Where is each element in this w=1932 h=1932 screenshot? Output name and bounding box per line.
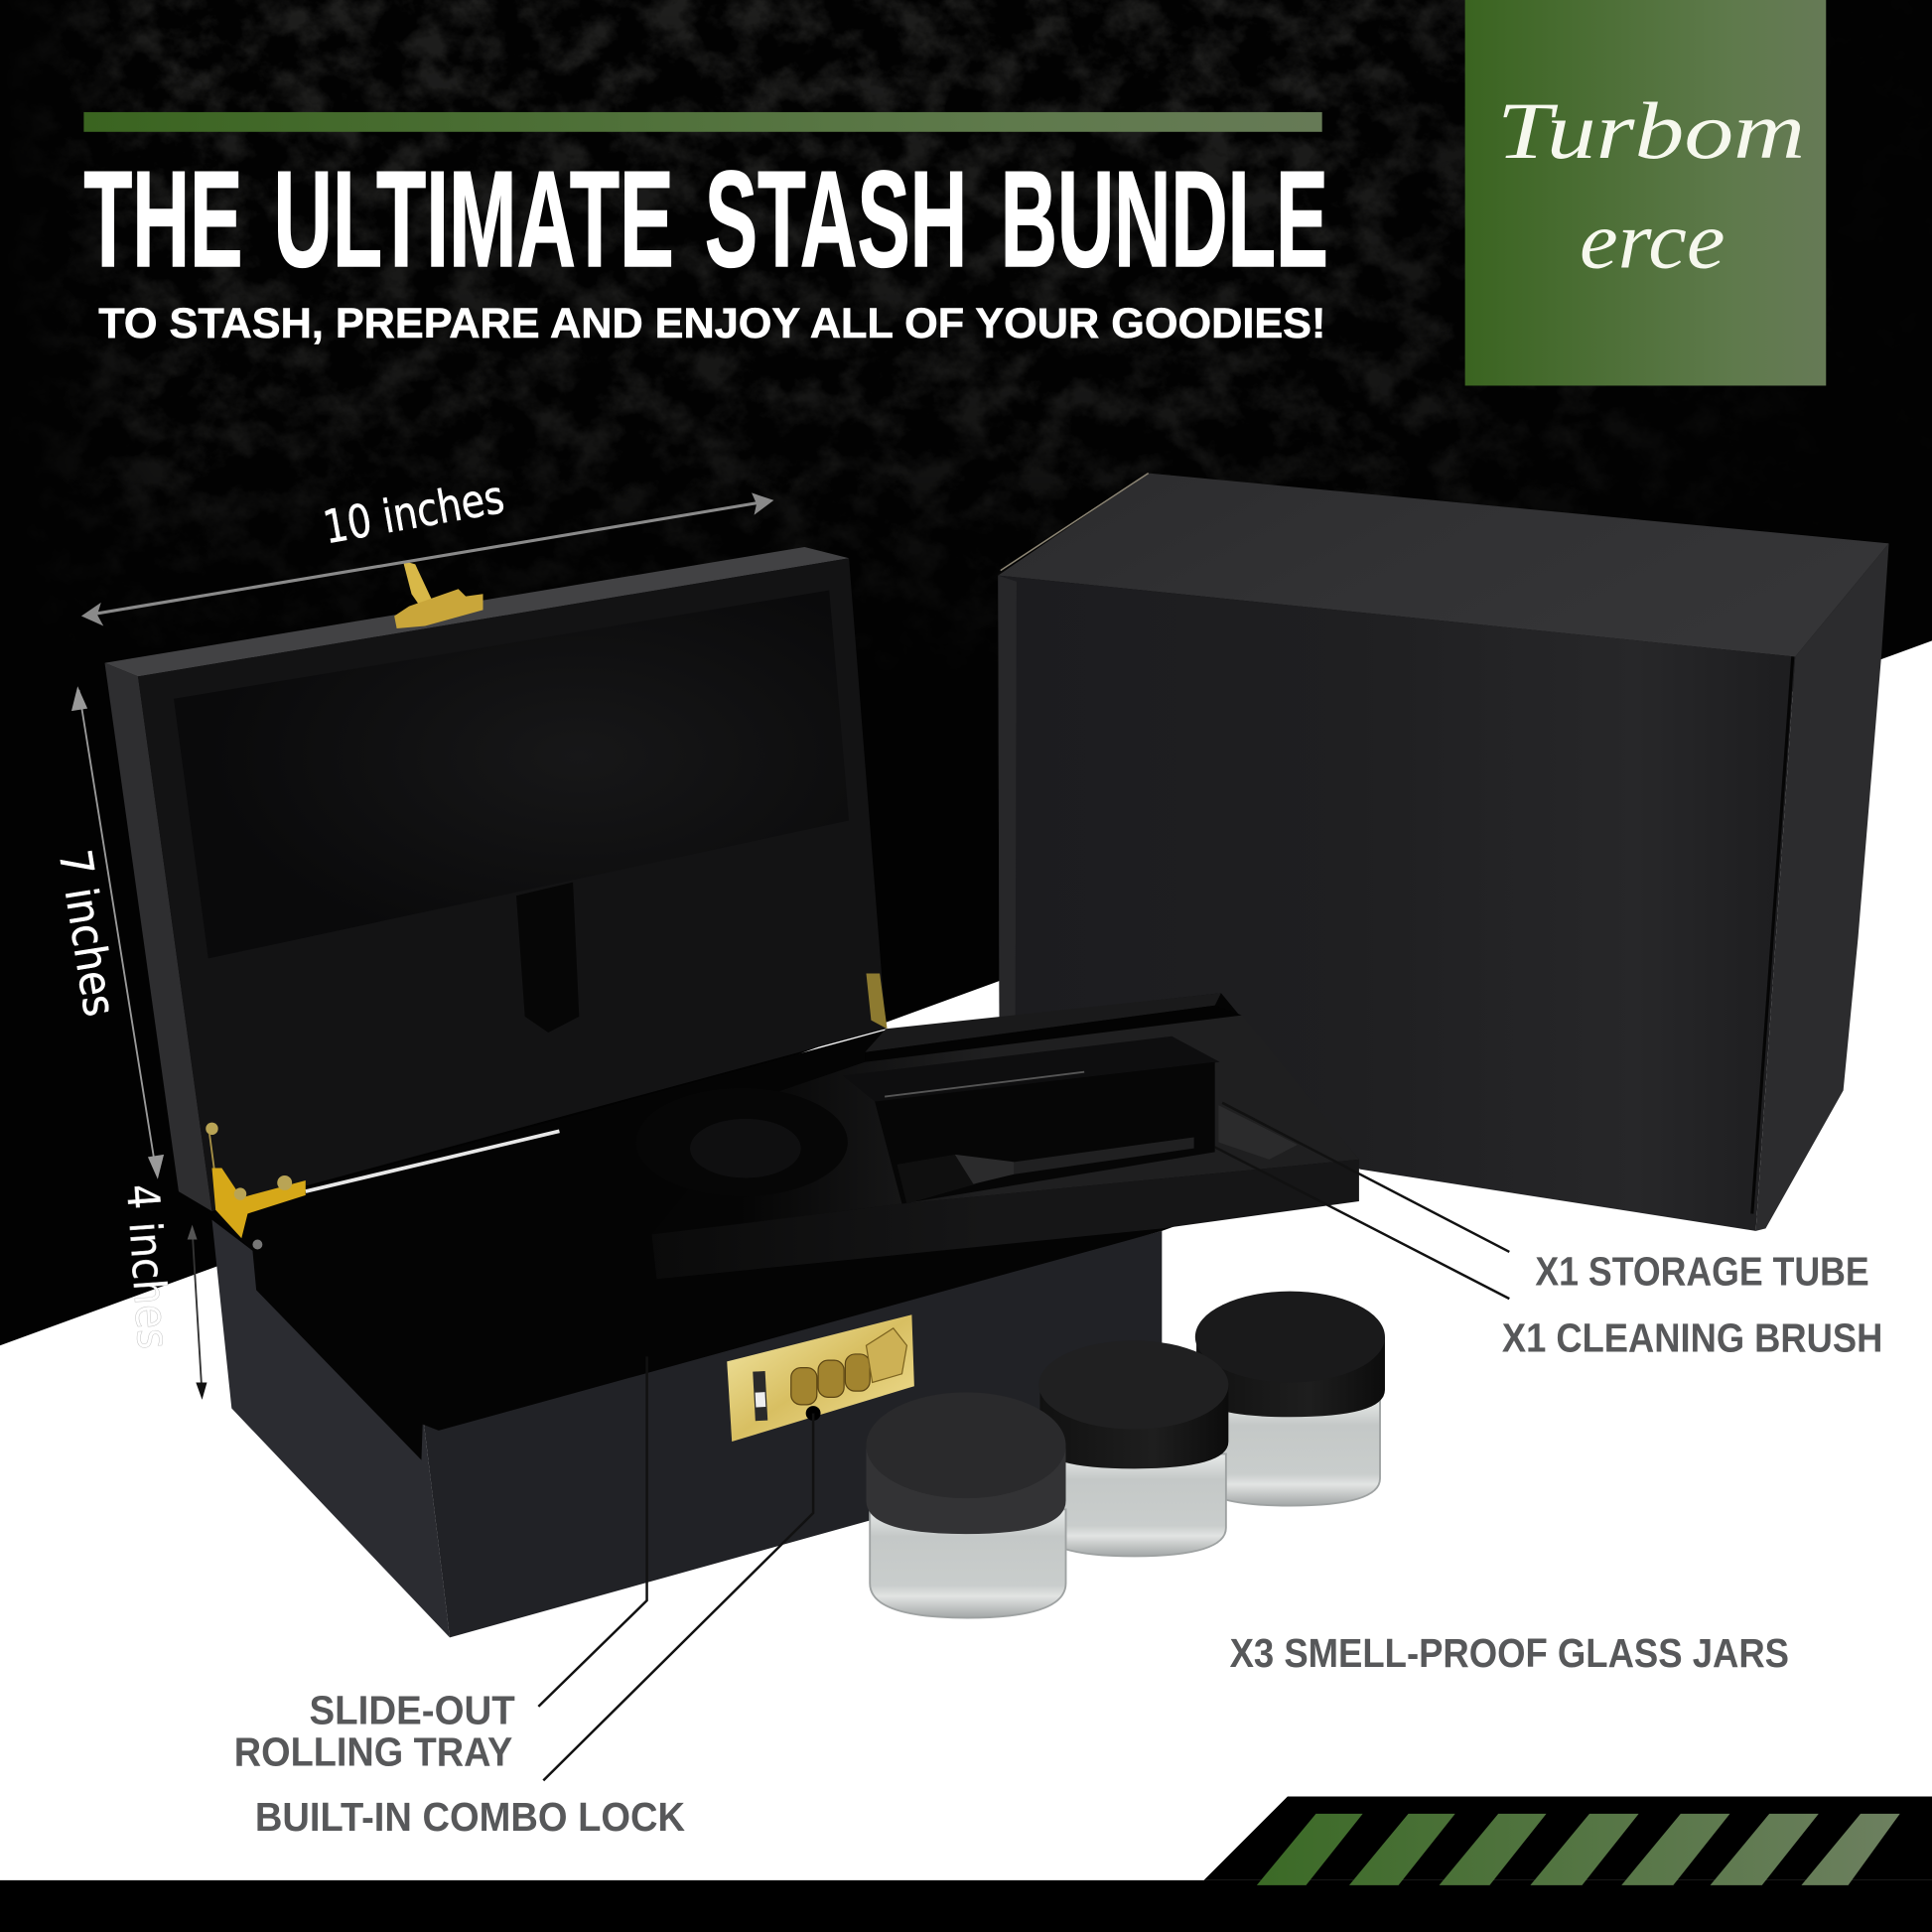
jar 2 xyxy=(1038,1340,1228,1556)
tray top surface xyxy=(652,1016,1359,1235)
label: rolling tray: SLIDE-OUT xyxy=(310,1687,515,1732)
tray back strip xyxy=(865,993,1221,1052)
storage jars xyxy=(866,1292,1385,1618)
dimension: 10 inches: 10 inches xyxy=(319,470,508,554)
tube channel xyxy=(843,1036,1220,1102)
lid left edge xyxy=(104,663,211,1211)
lid top edge xyxy=(104,547,849,676)
white rod xyxy=(306,1131,559,1191)
bottom black band xyxy=(0,1796,1932,1932)
brand text: erce xyxy=(1580,195,1725,285)
tray groove xyxy=(865,1006,1242,1067)
base left face xyxy=(211,1220,450,1637)
wooden stash box base xyxy=(211,993,1359,1637)
storage tube xyxy=(875,1062,1215,1204)
right hinge xyxy=(866,973,888,1029)
top green rule xyxy=(83,112,1322,132)
base interior xyxy=(211,993,1359,1460)
jar 3 xyxy=(1195,1292,1385,1506)
base front face xyxy=(424,1231,1162,1637)
cardboard gift box xyxy=(998,474,1889,1231)
box side flap xyxy=(998,576,1017,1023)
bottom green stripes xyxy=(1257,1814,1900,1885)
label: combo lock: BUILT-IN COMBO LOCK xyxy=(255,1794,685,1840)
title: ULTIMATE xyxy=(274,143,674,296)
dimension: 4 inches: 4 inches xyxy=(116,1182,179,1351)
label: rolling tray: ROLLING TRAY xyxy=(234,1728,512,1774)
lid recess xyxy=(174,590,849,959)
combination lock xyxy=(727,1314,914,1442)
lid inner face xyxy=(138,558,886,1211)
box top flap xyxy=(998,474,1889,656)
background: dark textured area xyxy=(40,0,1654,584)
title xyxy=(83,143,1328,296)
tray compartment xyxy=(1218,1105,1298,1160)
title: STASH xyxy=(705,143,967,296)
lid slot xyxy=(516,883,579,1033)
labels xyxy=(234,1248,1882,1840)
brand text: Turbom xyxy=(1497,85,1805,176)
title: THE xyxy=(83,143,242,296)
background: white diagonal area xyxy=(0,640,1932,1932)
brand text xyxy=(1497,85,1805,285)
dimension: 4 inches xyxy=(116,1182,207,1400)
dimension: 7 inches: 7 inches xyxy=(49,846,125,1020)
top latch xyxy=(394,561,483,628)
title: BUNDLE xyxy=(1001,143,1328,296)
cleaning brush xyxy=(897,1138,1194,1204)
brand panel xyxy=(1465,0,1826,385)
round cutout xyxy=(635,1088,848,1196)
label: rolling tray xyxy=(234,1687,515,1774)
box seam xyxy=(1752,656,1793,1213)
open lid xyxy=(104,547,886,1211)
box front face xyxy=(998,576,1795,1231)
tray front edge xyxy=(652,1160,1359,1279)
dimension: 10 inches xyxy=(81,470,773,625)
jar 1 xyxy=(866,1392,1066,1618)
label: storage tube: X1 STORAGE TUBE xyxy=(1535,1248,1869,1294)
callout lines xyxy=(538,1103,1509,1780)
rolling tray xyxy=(635,993,1359,1279)
subtitle: TO STASH, PREPARE AND ENJOY ALL OF YOUR GOODIES! xyxy=(98,300,1325,346)
box right face xyxy=(1756,543,1889,1231)
label: cleaning brush: X1 CLEANING BRUSH xyxy=(1502,1314,1882,1360)
label: glass jars: X3 SMELL-PROOF GLASS JARS xyxy=(1230,1630,1789,1676)
left hinge xyxy=(206,1123,306,1249)
dimension: 7 inches xyxy=(49,686,164,1179)
